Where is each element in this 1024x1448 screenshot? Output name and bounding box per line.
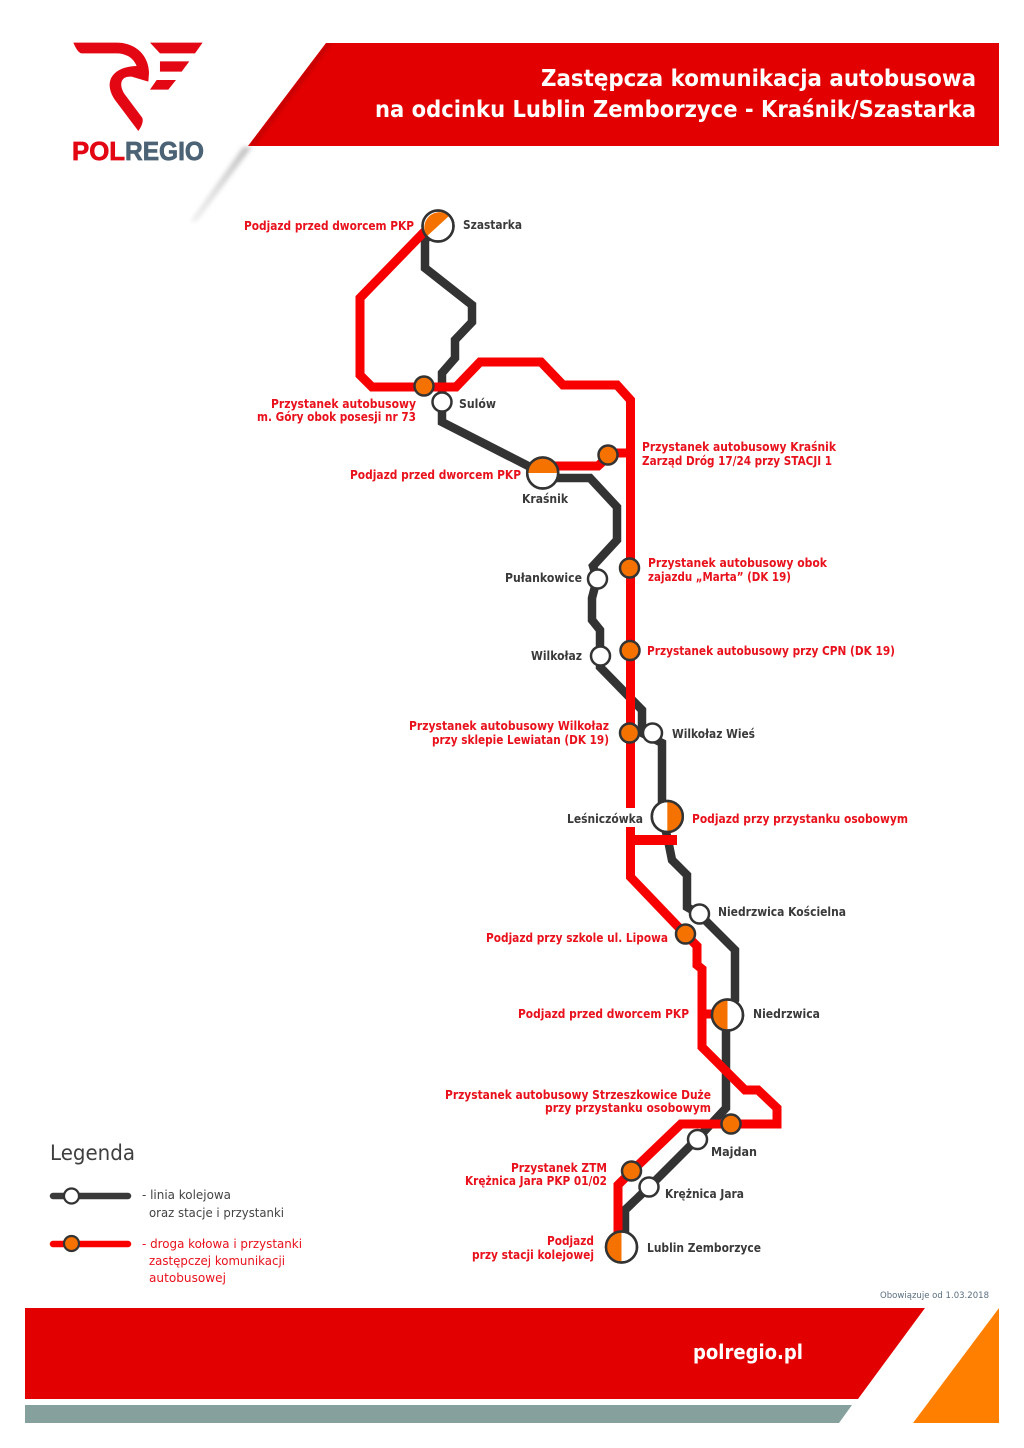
main road route bbox=[360, 230, 630, 808]
label: Lipowa stop: Podjazd przy szkole ul. Lipowa bbox=[486, 931, 668, 945]
station: Szastarka bbox=[422, 210, 454, 242]
station: Kraśnik bbox=[527, 458, 558, 488]
label: Leśniczówka: Leśniczówka bbox=[567, 812, 643, 826]
road branch Kraśnik bbox=[555, 455, 610, 466]
label: Kraśnik stop: Zarząd Dróg 17/24 przy STACJI 1 bbox=[642, 454, 832, 468]
label: Leśniczówka bus: Podjazd przy przystanku osobowym bbox=[692, 812, 908, 826]
label: Niedrzwica Kościelna: Niedrzwica Kościelna bbox=[718, 905, 846, 919]
label: Góry stop bbox=[257, 397, 416, 424]
title: Zastępcza komunikacja autobusowa bbox=[541, 66, 976, 92]
logo mark: R with wing bbox=[73, 43, 203, 131]
logo: Polregio bbox=[72, 43, 204, 166]
label: Lublin Zemborzyce: Lublin Zemborzyce bbox=[647, 1241, 761, 1255]
label: ZTM stop: Krężnica Jara PKP 01/02 bbox=[465, 1174, 607, 1188]
label: Szastarka: Szastarka bbox=[463, 218, 522, 232]
footer bbox=[25, 1308, 999, 1423]
label: Wilkołaz stop: Przystanek autobusowy Wilkołaz bbox=[409, 719, 609, 733]
station: Leśniczówka bbox=[652, 801, 683, 832]
label: Góry stop: Przystanek autobusowy bbox=[271, 397, 416, 411]
label: Kraśnik stop bbox=[642, 440, 837, 468]
footer red band bbox=[25, 1308, 925, 1399]
legend: railway text: - linia kolejowa bbox=[142, 1187, 231, 1202]
label: Góry stop: m. Góry obok posesji nr 73 bbox=[257, 410, 416, 424]
label: Szastarka bus: Podjazd przed dworcem PKP bbox=[244, 219, 414, 233]
label: Niedrzwica: Niedrzwica bbox=[753, 1007, 820, 1021]
banner shape bbox=[248, 43, 999, 146]
legend: railway sample bbox=[53, 1188, 128, 1204]
label: Kraśnik stop: Przystanek autobusowy Kraśnik bbox=[642, 440, 837, 454]
railway stops bbox=[432, 392, 709, 1196]
label: Strzeszkowice stop: przy przystanku osobowym bbox=[545, 1101, 711, 1115]
legend: railway text: oraz stacje i przystanki bbox=[149, 1205, 284, 1220]
label: ZTM stop: Przystanek ZTM bbox=[511, 1161, 607, 1175]
label: Lublin Zemborzyce bus: Podjazd bbox=[547, 1234, 594, 1248]
label: Sulów: Sulów bbox=[459, 397, 496, 411]
label: Wilkołaz Wieś: Wilkołaz Wieś bbox=[672, 727, 755, 741]
label: ZTM stop bbox=[465, 1161, 607, 1188]
station: Lublin Zemborzyce bbox=[606, 1232, 637, 1262]
bus stops bbox=[414, 376, 740, 1180]
road branch Niedrzwica bbox=[702, 1010, 716, 1018]
legend heading: Legenda bbox=[50, 1141, 135, 1165]
label: Marta stop: zajazdu „Marta” (DK 19) bbox=[648, 570, 791, 584]
footer url: polregio.pl bbox=[693, 1340, 803, 1364]
road branch Kraśnik stop bbox=[610, 448, 630, 458]
label: Strzeszkowice stop bbox=[445, 1088, 711, 1115]
label: Krężnica Jara: Krężnica Jara bbox=[665, 1187, 744, 1201]
banner edge shade bbox=[248, 43, 332, 146]
legend: road text: - droga kołowa i przystanki bbox=[142, 1236, 302, 1251]
label: Kraśnik bus: Podjazd przed dworcem PKP bbox=[350, 468, 521, 482]
title bbox=[375, 66, 976, 123]
footer orange triangle bbox=[913, 1308, 999, 1423]
label: Majdan: Majdan bbox=[711, 1145, 757, 1159]
label: Lublin Zemborzyce bus: przy stacji kolejowej bbox=[472, 1248, 594, 1262]
label: Niedrzwica bus: Podjazd przed dworcem PKP bbox=[518, 1007, 689, 1021]
legend: road text: autobusowej bbox=[149, 1270, 226, 1285]
bus route bbox=[360, 230, 777, 1245]
legend: railway text bbox=[142, 1187, 284, 1220]
label: Wilkołaz stop: przy sklepie Lewiatan (DK 19) bbox=[432, 733, 609, 747]
legend: road text bbox=[142, 1236, 302, 1285]
label: Pułankowice: Pułankowice bbox=[505, 571, 582, 585]
station: Niedrzwica bbox=[712, 1000, 743, 1030]
road route south bbox=[618, 827, 777, 1245]
road branch Leśniczówka bbox=[631, 835, 677, 845]
label: Wilkołaz stop bbox=[409, 719, 609, 747]
legend bbox=[50, 1141, 302, 1285]
legend: road text: zastępczej komunikacji bbox=[149, 1253, 285, 1268]
footer grey band bbox=[25, 1405, 852, 1423]
label: Marta stop bbox=[648, 556, 828, 584]
header banner bbox=[248, 43, 999, 146]
label: Kraśnik: Kraśnik bbox=[522, 492, 569, 506]
label: Marta stop: Przystanek autobusowy obok bbox=[648, 556, 828, 570]
label: Wilkołaz: Wilkołaz bbox=[531, 649, 582, 663]
label: Strzeszkowice stop: Przystanek autobusowy Strzeszkowice Duże bbox=[445, 1088, 711, 1102]
road connector over Leśniczówka bbox=[631, 835, 677, 845]
label: CPN stop: Przystanek autobusowy przy CPN (DK 19) bbox=[647, 644, 895, 658]
logo wordmark: REGIO bbox=[125, 136, 204, 166]
legend: road sample bbox=[53, 1236, 128, 1251]
title: na odcinku Lublin Zemborzyce - Kraśnik/Szastarka bbox=[375, 97, 976, 123]
label: Lublin Zemborzyce bus bbox=[472, 1234, 594, 1262]
logo wordmark: POL bbox=[72, 136, 125, 166]
railway line bbox=[425, 226, 735, 1248]
validity note: Obowiązuje od 1.03.2018 bbox=[880, 1291, 989, 1301]
header shadow bbox=[190, 147, 252, 222]
